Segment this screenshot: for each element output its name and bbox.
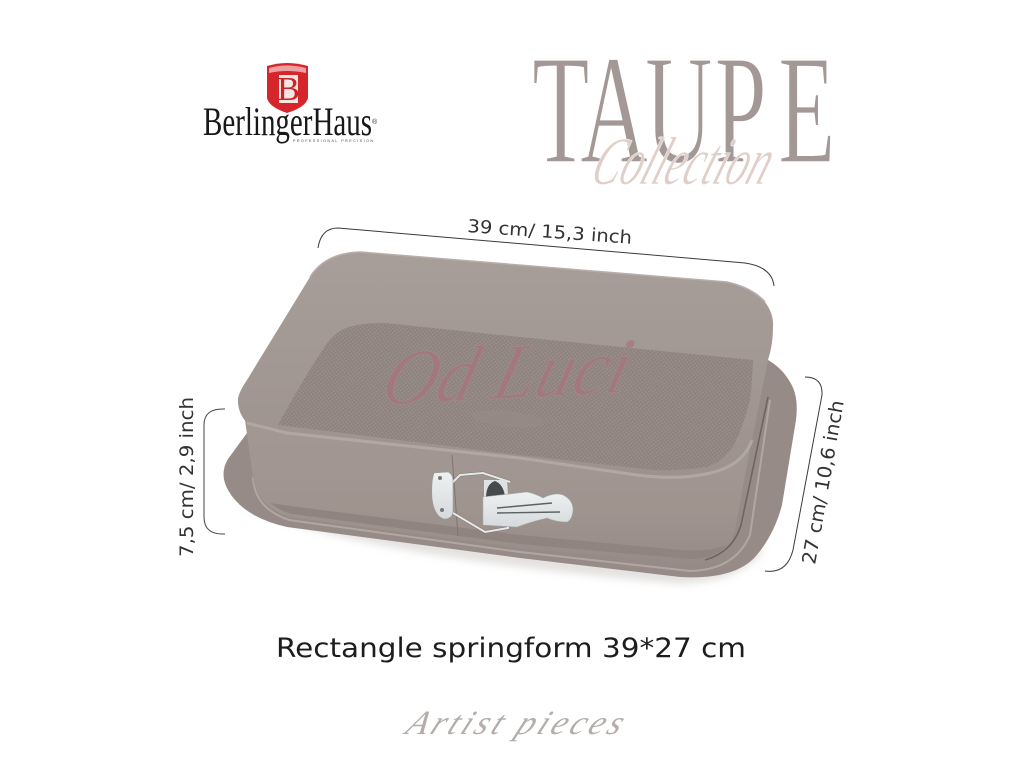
mesh floor	[278, 323, 753, 470]
pan bottom band	[270, 503, 727, 559]
tray shadow	[240, 505, 765, 584]
registered mark: ®	[372, 118, 378, 126]
latch clasp body	[483, 492, 573, 527]
logo: Berlinger Haus	[203, 63, 378, 144]
logo tagline: PROFESSIONAL PRECISION	[293, 139, 373, 143]
right tray groove	[705, 397, 768, 560]
latch	[432, 472, 573, 532]
icon: red shield: B	[277, 71, 300, 108]
height label: 7,5 cm/ 2,9 inch	[176, 397, 198, 557]
seam	[452, 455, 458, 536]
pan front wall	[245, 340, 770, 563]
product: springform pan	[224, 252, 797, 584]
width bracket	[765, 377, 822, 571]
height bracket	[204, 409, 225, 534]
script: Collection: Collection	[582, 124, 786, 199]
latch clasp top	[484, 480, 508, 498]
heading: TAUPE: TAUPE	[532, 23, 835, 196]
watermark: Od Luci: Od Luci	[373, 323, 642, 423]
logo: Taupe Collection	[532, 23, 835, 199]
tray rim highlight	[253, 400, 770, 571]
pan rim outer	[238, 252, 773, 478]
length bracket	[318, 228, 774, 286]
icon: red shield	[267, 63, 308, 113]
dimension: length	[318, 216, 774, 286]
footer: Artist pieces: Artist pieces	[399, 704, 632, 742]
tray base	[224, 360, 797, 577]
dimension: height	[176, 397, 225, 557]
upper rim highlight	[310, 252, 765, 302]
latch hinge plate	[432, 472, 453, 519]
dimension: width	[765, 377, 849, 571]
rim front highlight	[247, 423, 752, 477]
length label: 39 cm/ 15,3 inch	[467, 216, 633, 249]
logo wordmark: BerlingerHaus	[203, 99, 372, 144]
width label: 27 cm/ 10,6 inch	[798, 399, 849, 566]
latch slot	[497, 503, 560, 513]
title: product name: Rectangle springform 39*27 cm	[276, 633, 746, 664]
latch rivets	[438, 476, 442, 480]
floor embossed oval	[471, 408, 545, 430]
latch wire	[452, 473, 510, 532]
